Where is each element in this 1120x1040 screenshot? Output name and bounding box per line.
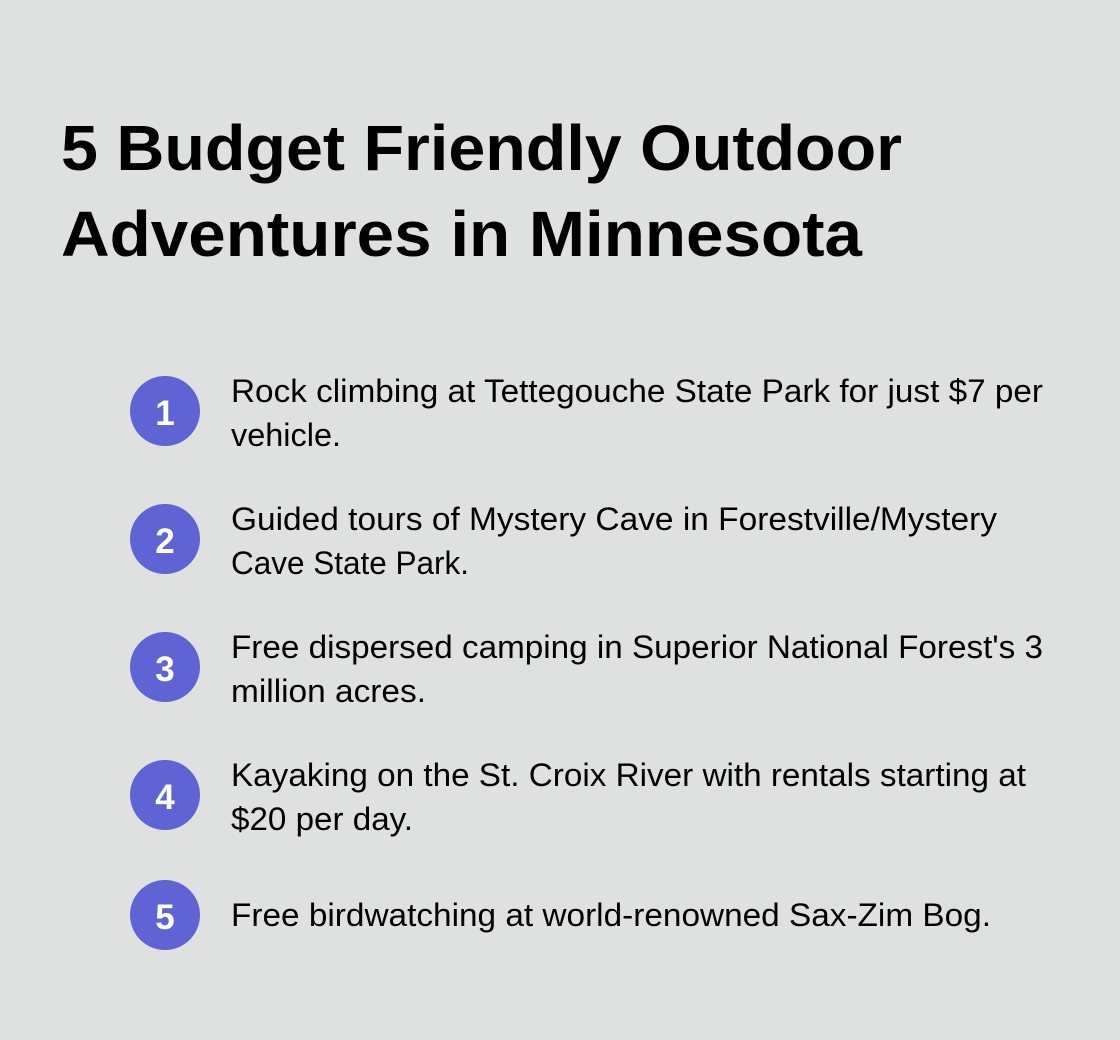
title: Adventures in Minnesota <box>61 198 862 270</box>
list item 5: 5 <box>155 898 175 937</box>
list item 4 <box>130 757 1026 837</box>
list item 1 <box>130 373 1043 453</box>
list item 3: million acres. <box>231 673 426 709</box>
title <box>61 112 902 270</box>
list item 5: Free birdwatching at world-renowned Sax-Zim Bog. <box>231 897 991 933</box>
list item 3: 3 <box>155 650 175 689</box>
list item 5 <box>130 880 991 950</box>
list item 1: 1 <box>155 394 175 433</box>
list item 2: 2 <box>155 522 175 561</box>
list item 3 <box>130 629 1043 709</box>
list item 2: Guided tours of Mystery Cave in Forestville/Mystery <box>231 501 997 537</box>
list item 4: 4 <box>155 778 175 817</box>
list item 4: $20 per day. <box>231 801 413 837</box>
list item 2 <box>130 501 997 581</box>
title: 5 Budget Friendly Outdoor <box>61 112 902 184</box>
list item 1: vehicle. <box>231 417 341 453</box>
list item 1: Rock climbing at Tettegouche State Park for just $7 per <box>231 373 1043 409</box>
list item 3: Free dispersed camping in Superior National Forest's 3 <box>231 629 1043 665</box>
list item 4: Kayaking on the St. Croix River with rentals starting at <box>231 757 1026 793</box>
list item 2: Cave State Park. <box>231 545 469 581</box>
